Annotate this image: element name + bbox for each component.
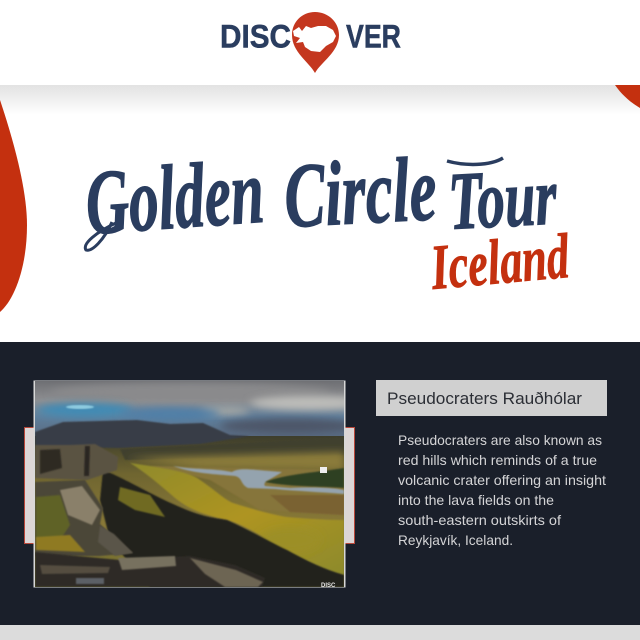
shadowed slope	[100, 470, 344, 587]
flourish: T crossbar	[447, 158, 503, 164]
header band shadow	[0, 85, 640, 115]
body text: south-eastern outskirts of	[398, 512, 561, 528]
decorative red shape: top right	[615, 85, 640, 108]
body text	[398, 432, 606, 548]
title	[82, 137, 560, 254]
church	[320, 467, 327, 473]
panel: Pseudocraters	[0, 342, 640, 625]
logo	[220, 12, 401, 73]
footer band	[0, 625, 640, 640]
body text: into the lava fields on the	[398, 492, 554, 508]
logo text: VER: VER	[346, 18, 401, 54]
photo side tab: right	[342, 428, 354, 544]
flourish: G tail	[85, 222, 118, 250]
title word: Golden: Golden	[82, 140, 267, 254]
body text: Reykjavík, Iceland.	[398, 532, 513, 548]
valley tones	[120, 444, 344, 460]
logo text: DISC: DISC	[220, 18, 291, 54]
subtitle: Iceland: Iceland	[427, 220, 572, 303]
decorative red shape: left	[0, 100, 27, 312]
far hills	[35, 420, 250, 448]
body text: volcanic crater offering an insight	[398, 472, 606, 488]
title word: Tour: Tour	[446, 150, 560, 247]
photo: Thingvellir landscape	[34, 380, 370, 589]
foreground rocks	[35, 552, 265, 587]
heading box	[376, 380, 607, 416]
title word: Circle: Circle	[282, 137, 439, 247]
body text: Pseudocraters are also known as	[398, 432, 602, 448]
photo watermark: DISC	[321, 583, 336, 589]
panel background	[0, 342, 640, 625]
sunlit trees	[130, 463, 344, 575]
left rocks	[35, 444, 118, 480]
heading text: Pseudocraters Rauðhólar	[387, 390, 583, 408]
body text: red hills which reminds of a true	[398, 452, 597, 468]
photo side tab: left	[24, 428, 36, 544]
river	[173, 466, 344, 494]
icon: map pin with Iceland	[292, 12, 339, 73]
distant island of trees	[265, 468, 344, 488]
